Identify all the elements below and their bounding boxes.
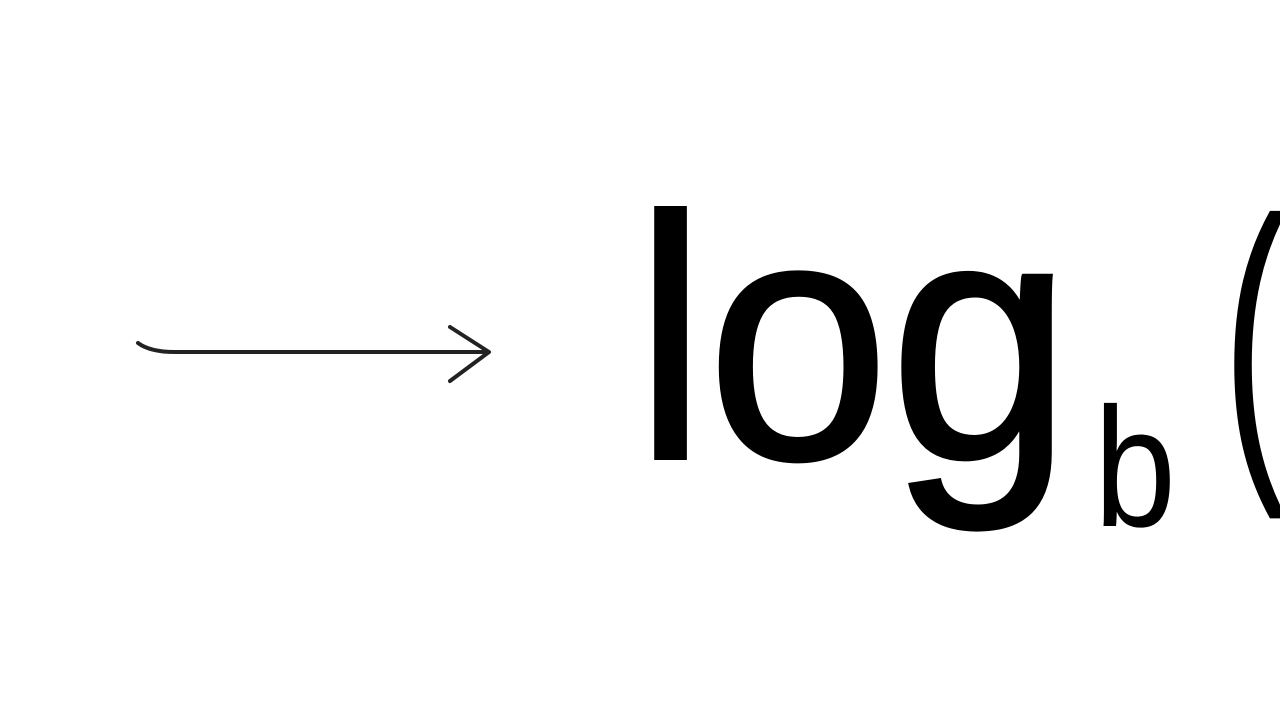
subscript b: b xyxy=(1094,373,1176,563)
formula: log_b( xyxy=(634,147,1280,563)
arrow xyxy=(138,327,489,381)
log text: log xyxy=(634,147,1072,533)
